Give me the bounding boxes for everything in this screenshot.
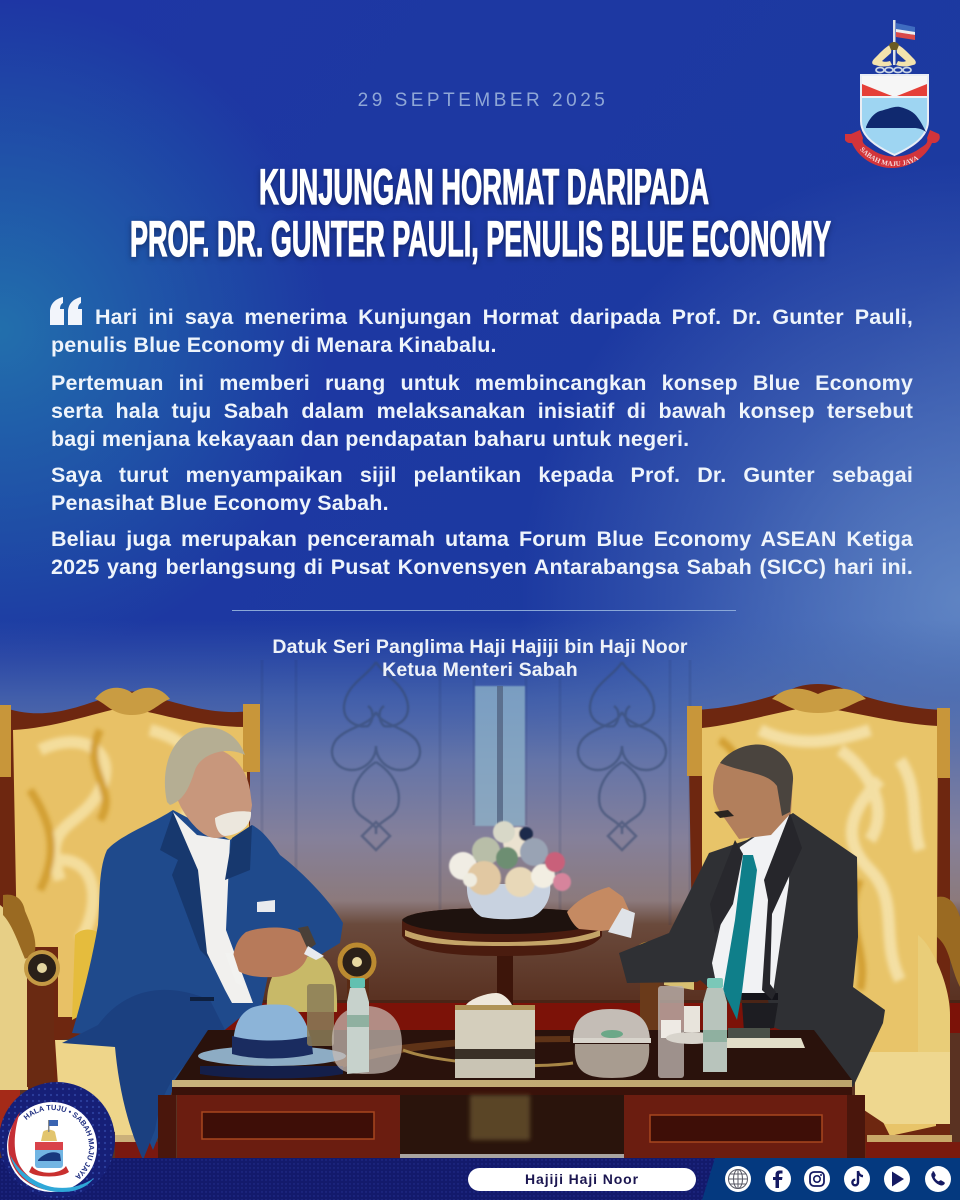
body text: serta hala tuju Sabah dalam melaksanakan inisiatif di bawah konsep tersebut — [51, 399, 913, 423]
round table behind — [402, 908, 602, 1010]
drinking glass and cup right — [658, 986, 718, 1078]
body text: Beliau juga merupakan penceramah utama Forum Blue Economy ASEAN Ketiga — [51, 527, 913, 551]
body text: Saya turut menyampaikan sijil pelantikan kepada Prof. Dr. Gunter sebagai — [51, 463, 913, 487]
body text — [51, 305, 913, 579]
books and papers — [727, 1028, 805, 1048]
tissue box — [455, 993, 535, 1078]
icon: play — [884, 1166, 910, 1192]
Prof. Dr. Gunter Pauli seated left — [62, 727, 343, 1160]
icon: facebook — [765, 1166, 791, 1192]
body text: 2025 yang berlangsung di Pusat Konvensyen Antarabangsa Sabah (SICC) hari ini. — [51, 555, 913, 579]
attribution: Datuk Seri Panglima Haji Hajiji bin Haji Noor — [272, 636, 688, 658]
body text: penulis Blue Economy di Menara Kinabalu. — [51, 333, 497, 357]
water bottle right — [703, 978, 727, 1072]
crest motto: SABAH MAJU JAYA — [860, 147, 919, 166]
icon: globe — [725, 1166, 751, 1192]
left gilded chair — [0, 688, 374, 1158]
blue hat — [198, 1004, 346, 1078]
badge curved text: HALA TUJU • SABAH MAJU JAYA — [23, 1104, 94, 1179]
body text: Hari ini saya menerima Kunjungan Hormat daripada Prof. Dr. Gunter Pauli, — [95, 305, 913, 329]
icon: phone — [925, 1166, 951, 1192]
Datuk Seri Hajiji seated right — [567, 745, 885, 1087]
wall panels and ornaments — [0, 660, 960, 1150]
name pill: Hajiji Haji Noor — [525, 1171, 639, 1187]
low coffee table — [158, 1030, 865, 1158]
icon: instagram — [804, 1166, 830, 1192]
drinking glass left — [307, 984, 334, 1046]
social icons — [725, 1166, 951, 1192]
attribution — [272, 636, 688, 681]
water bottle left — [347, 978, 369, 1074]
body text: Penasihat Blue Economy Sabah. — [51, 491, 389, 515]
footer bar — [0, 1158, 960, 1200]
food container left — [332, 1006, 402, 1074]
quote mark icon — [50, 297, 82, 325]
body text: Pertemuan ini memberi ruang untuk membincangkan konsep Blue Economy — [51, 371, 913, 395]
emblem badge bottom left — [0, 1082, 115, 1198]
food container right — [573, 1009, 651, 1078]
flower arrangement and vase — [449, 821, 571, 919]
date: 29 SEPTEMBER 2025 — [358, 90, 608, 111]
state crest top right — [845, 20, 940, 168]
name pill — [468, 1168, 696, 1191]
divider line — [232, 610, 736, 611]
right gilded chair — [633, 684, 960, 1160]
title — [128, 159, 833, 268]
icon: tiktok — [844, 1166, 870, 1192]
attribution: Ketua Menteri Sabah — [382, 659, 578, 681]
body text: bagi menjana kekayaan dan pendapatan baharu untuk negeri. — [51, 427, 689, 451]
